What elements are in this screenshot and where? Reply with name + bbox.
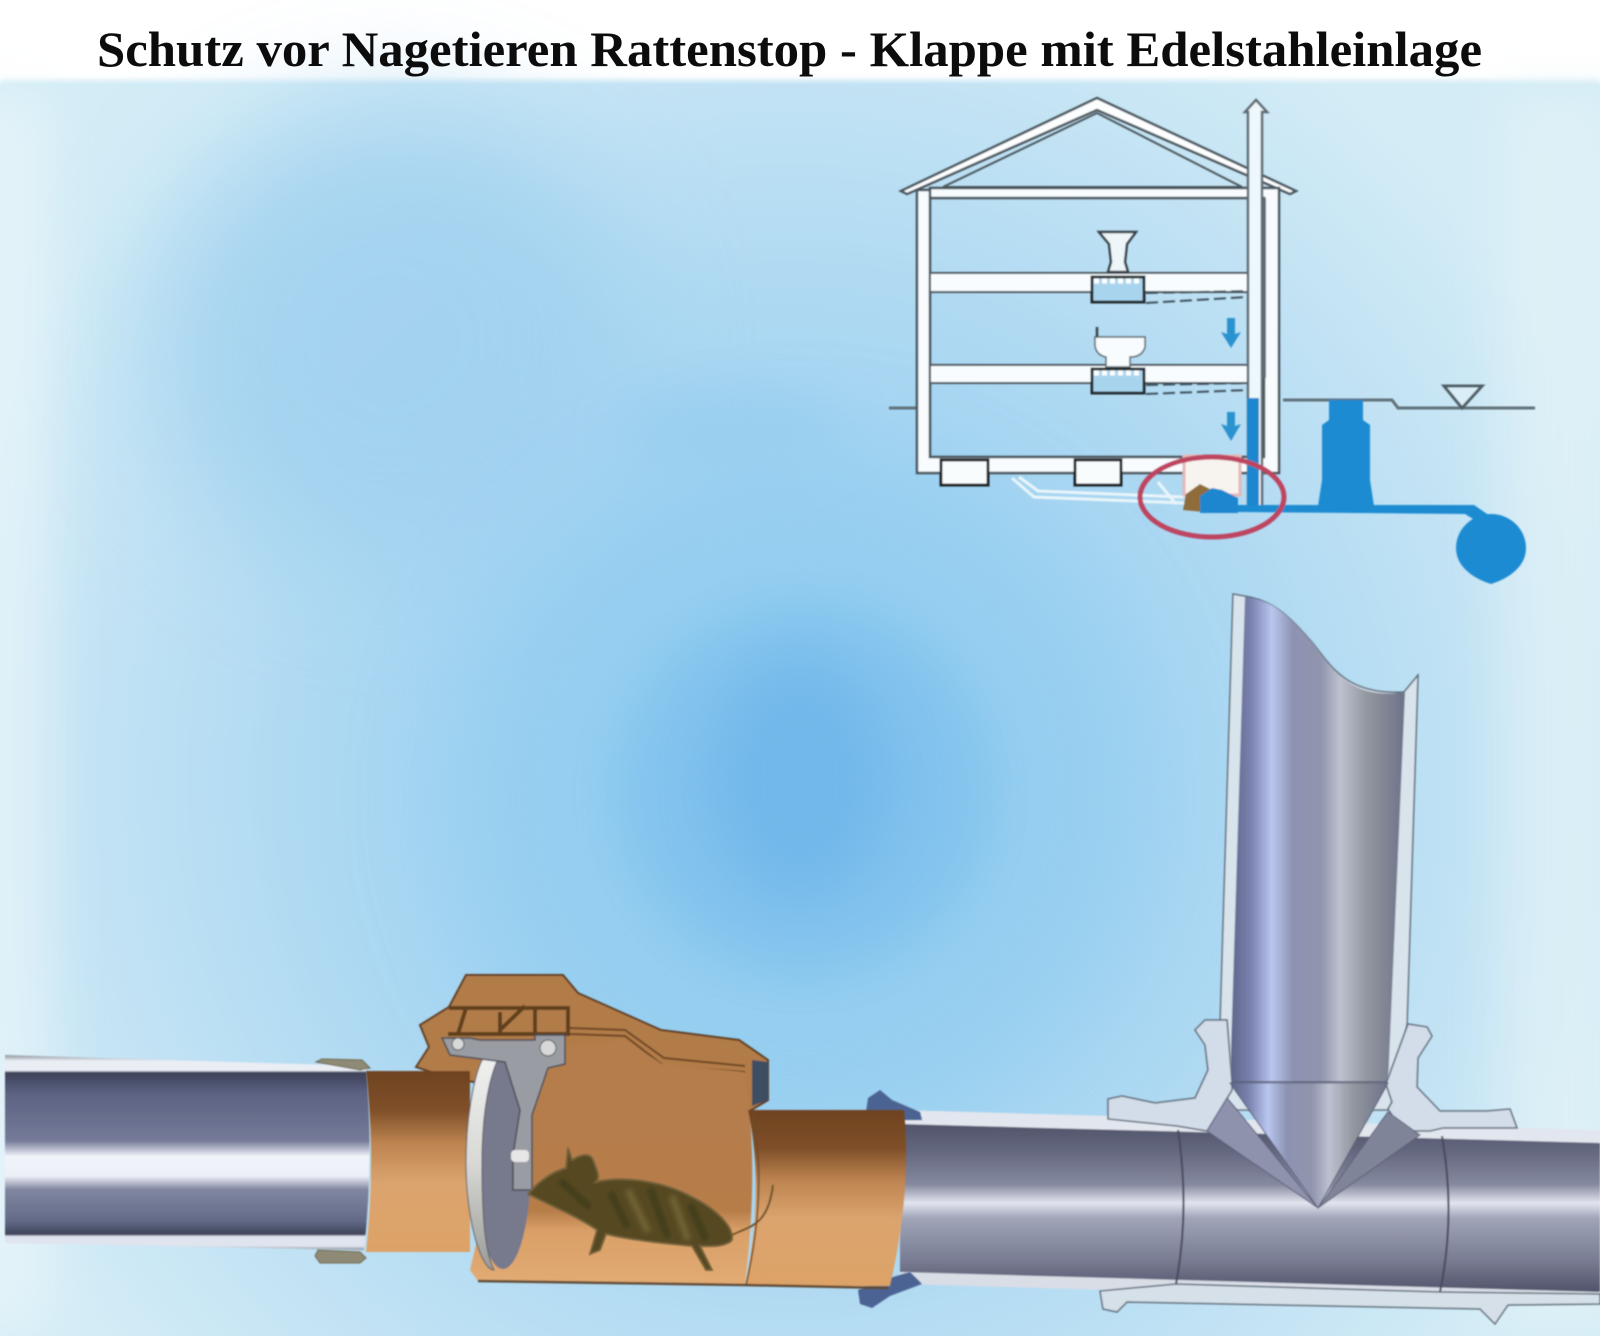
flow arrows [1221, 318, 1241, 441]
valve housing top [416, 975, 768, 1112]
vent stack [1245, 100, 1267, 508]
washbasin fixture [1092, 232, 1144, 302]
red highlight ellipse [1140, 457, 1284, 537]
lower flange [1100, 1284, 1600, 1324]
right main pipe with T-junction [900, 1020, 1600, 1324]
pipe interior [1230, 597, 1405, 1084]
toilet fixture [1092, 327, 1145, 393]
sewer connection [1238, 400, 1526, 584]
basement floor drains [941, 460, 1121, 485]
pipe collars [316, 1059, 370, 1070]
socket sleeve seams [1176, 1130, 1449, 1292]
left T flange [1108, 1020, 1232, 1131]
pipe wall section [1220, 594, 1418, 1110]
left socket [366, 1071, 470, 1252]
house outline [901, 98, 1296, 473]
valve chamber [470, 1040, 752, 1284]
ground water level marker [1444, 386, 1482, 408]
stainless flap disc [466, 1055, 531, 1270]
right T flange [1386, 1024, 1517, 1131]
house drainage diagram [889, 98, 1535, 584]
left drain pipe [5, 1055, 370, 1263]
right socket [745, 1110, 906, 1286]
vertical branch pipe [1220, 594, 1418, 1110]
bonnet ribs [448, 1006, 570, 1034]
rat-stop backflow valve [366, 975, 906, 1288]
rat [528, 1148, 773, 1270]
hinge bracket [442, 1035, 565, 1190]
backflow valve [1183, 456, 1240, 513]
title: Schutz vor Nagetieren Rattenstop - Klappe mit Edelstahleinlage [97, 21, 1482, 77]
branch junction cone [1207, 1083, 1420, 1208]
ground line [889, 400, 1535, 408]
waste water pipes [1012, 291, 1248, 504]
rubber gasket [858, 1090, 922, 1308]
